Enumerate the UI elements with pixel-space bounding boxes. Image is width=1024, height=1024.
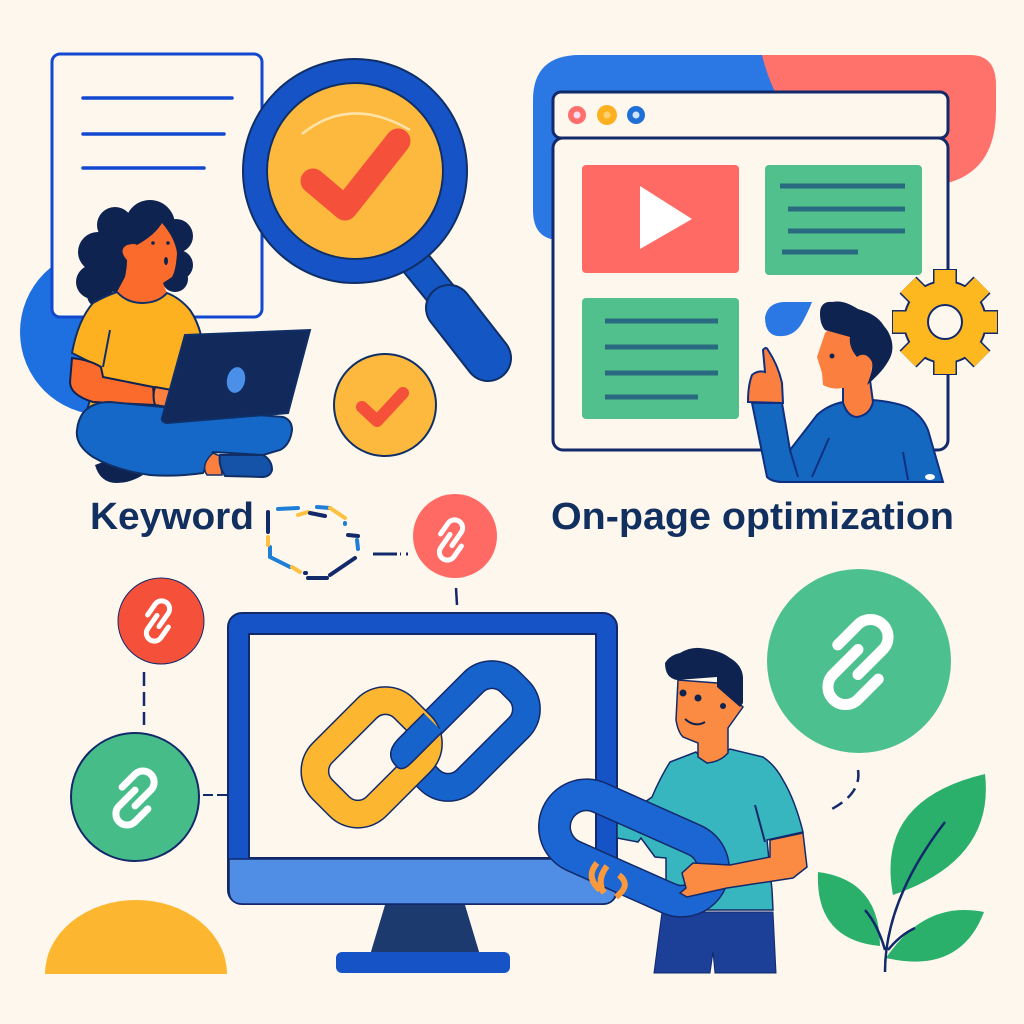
orange fingers on link [592,863,625,897]
man holding chain [544,648,807,973]
woman face [117,223,177,303]
man arm and hand [680,833,807,897]
man shirt [617,749,803,910]
dashed connector between badges [143,672,145,725]
monitor [228,613,617,973]
woman arm [70,358,155,405]
dashed multicolor link shape [268,507,358,578]
plant [818,774,986,972]
man pointing [748,301,943,482]
yellow semicircle [45,900,227,974]
dashed connector to top link badge [373,552,408,556]
man body [752,400,943,482]
browser window [553,92,948,450]
blue link overlap [384,713,442,772]
dashed connector to monitor [203,794,228,796]
icon: coral link badge [413,494,497,578]
icon: small check badge [334,354,436,456]
blue blob behind woman [20,249,186,415]
icon: magnifying glass with check [243,59,488,358]
monitor frame [228,613,617,904]
woman foot [220,455,272,477]
icon: red link badge [118,578,204,664]
monitor screen [249,634,596,858]
woman ankle [205,453,222,475]
heading: On-page optimization: On-page optimization [551,496,954,538]
blue chain link [403,664,537,798]
man hair [820,301,892,385]
icon: gear [892,269,998,375]
video card [582,165,739,273]
text card bottom [582,298,739,419]
man hair [665,648,743,707]
blob: coral backdrop [762,55,996,186]
monitor stand [370,905,480,955]
woman hand [154,387,172,407]
dashed connector down [456,588,457,605]
man face and neck [817,318,873,417]
icon: large green link badge [767,569,951,753]
icon: green link badge left [71,733,199,861]
woman hair [76,200,193,308]
large chain link [544,785,724,911]
yellow chain link [304,690,439,825]
browser title bar [553,92,948,138]
heading: Keyword: Keyword [90,496,254,538]
document panel [52,54,262,317]
laptop [162,330,310,423]
blob: blue backdrop [533,55,800,240]
woman eyes and mouth [151,241,170,265]
text card top [765,165,922,275]
woman dark foot [95,462,143,483]
browser window dots [568,105,645,125]
dashed connector curve [826,770,858,812]
man hand [748,348,783,403]
man neck and face [676,680,743,763]
speech drop [765,302,812,336]
man facial features [680,690,726,709]
woman with laptop [70,200,310,483]
woman legs [77,402,292,476]
man legs [654,912,776,973]
woman shirt [72,292,201,415]
